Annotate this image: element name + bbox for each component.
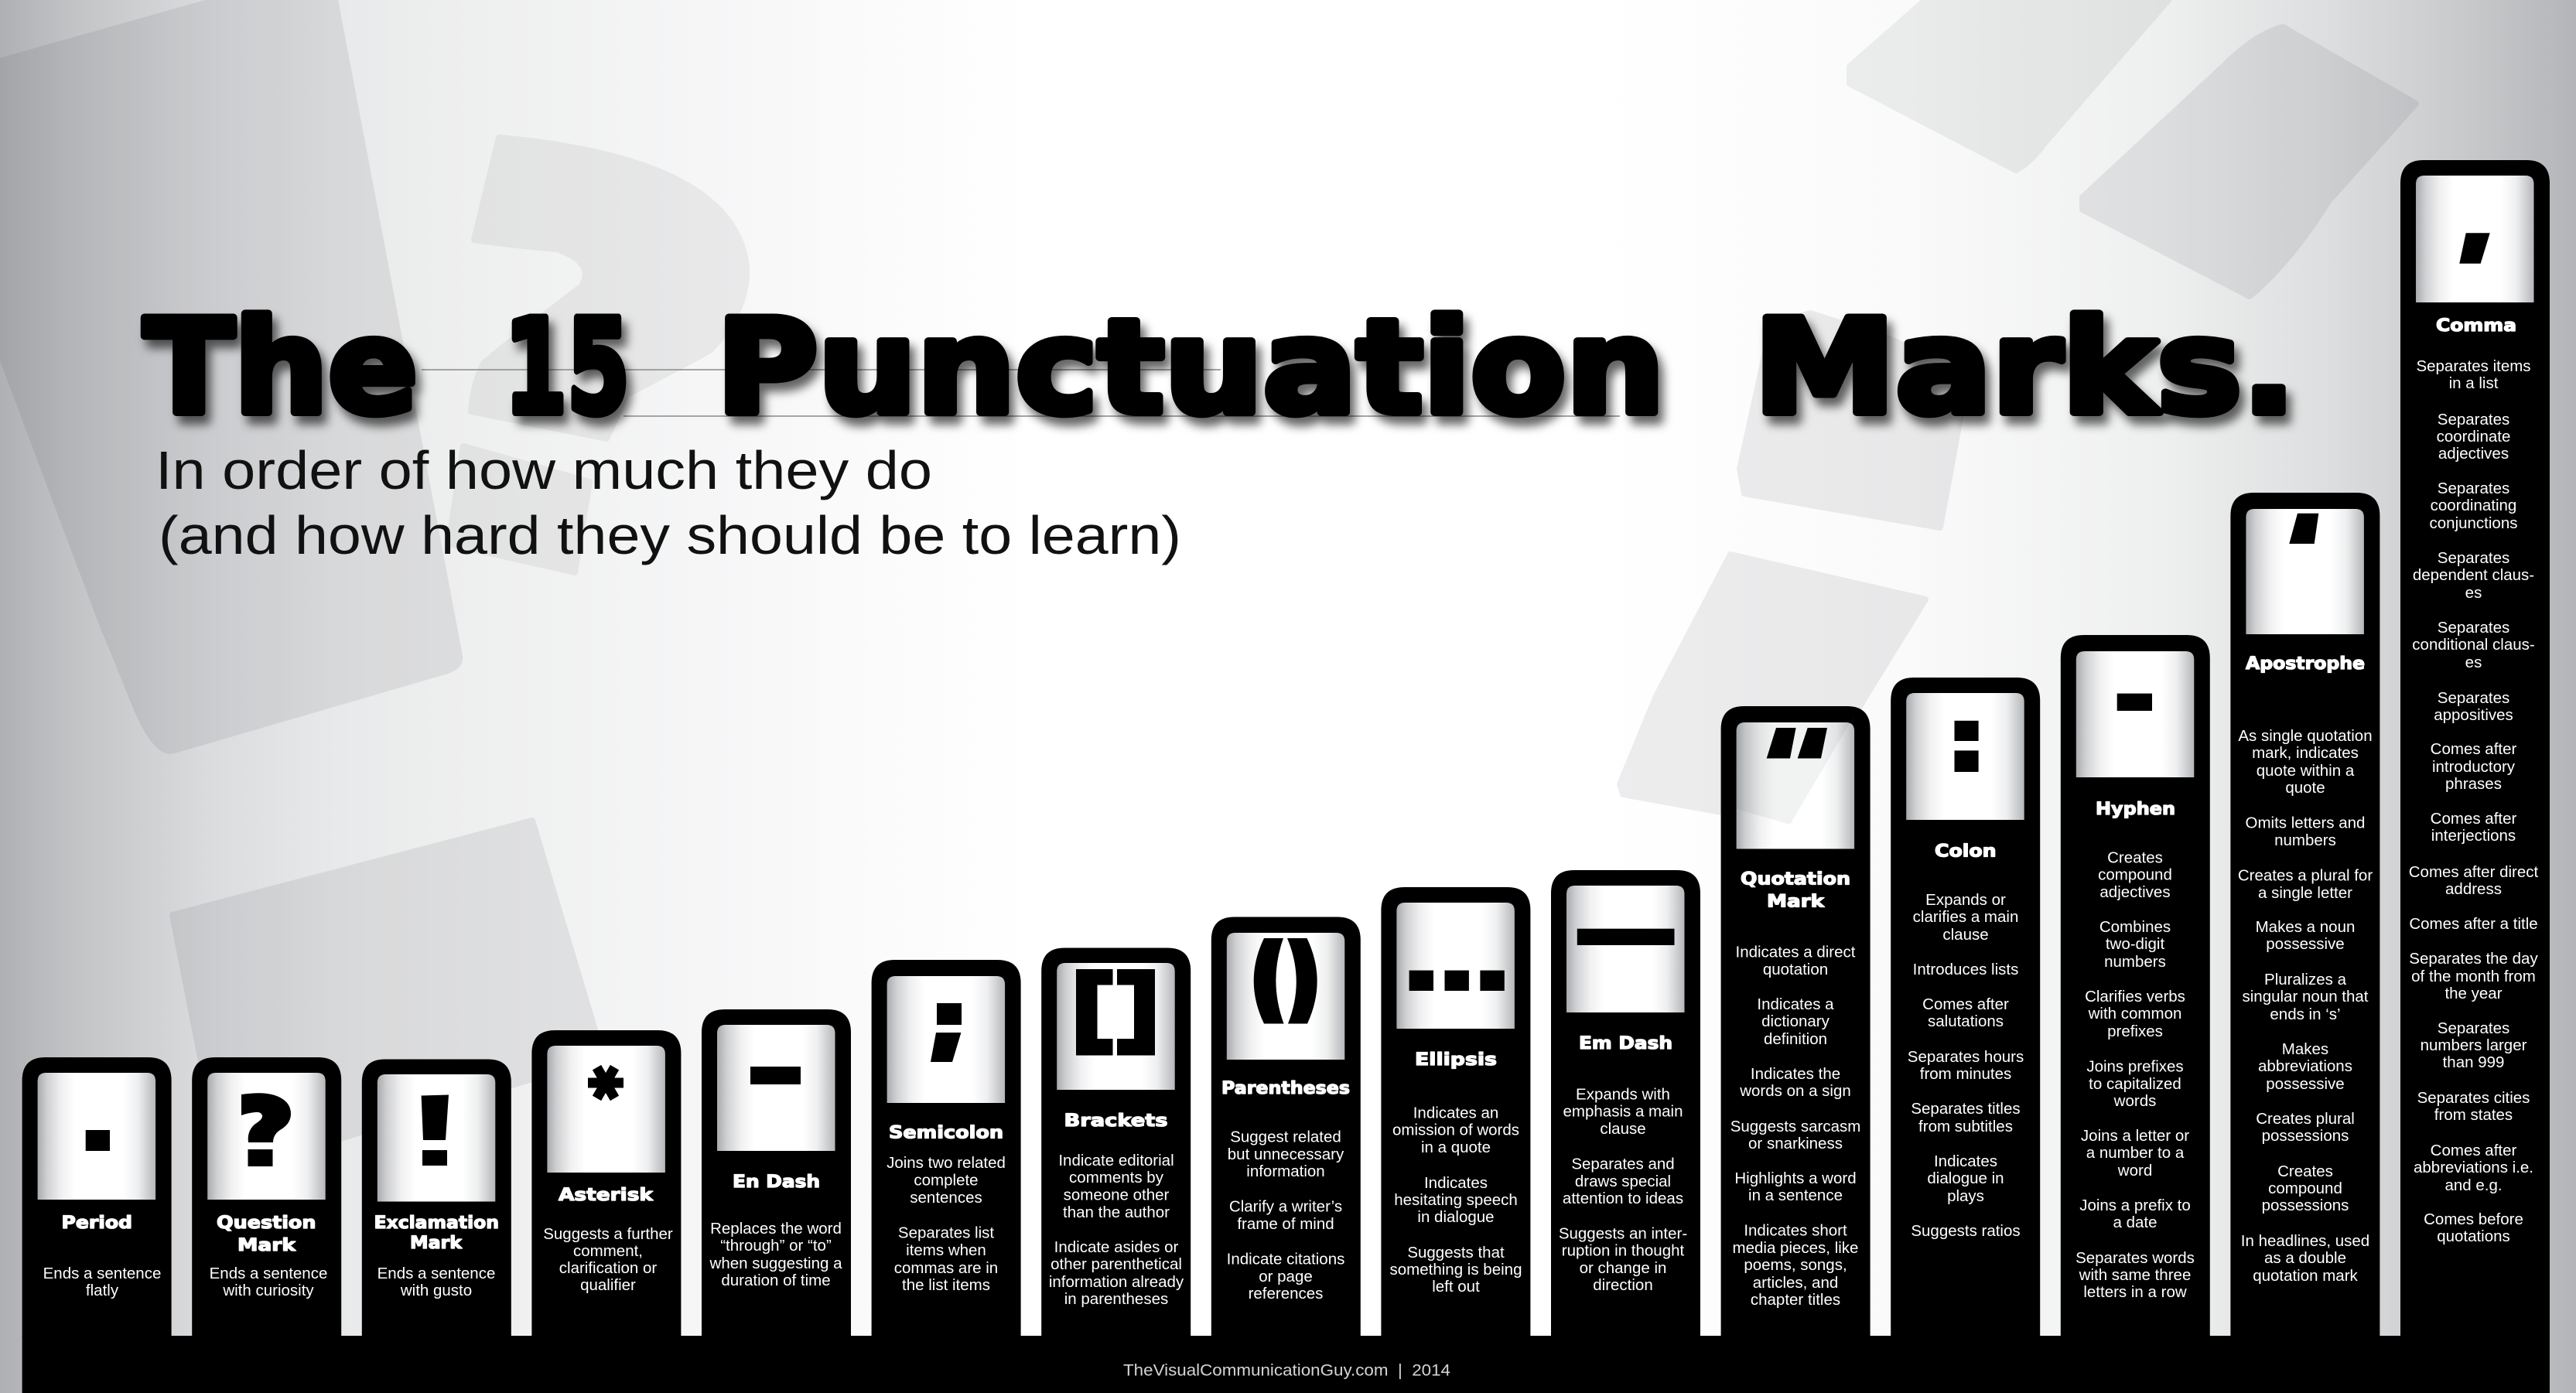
description: compound (2098, 866, 2172, 883)
description: Separates the day (2409, 950, 2538, 968)
description: coordinating (2431, 497, 2516, 514)
description: quotations (2437, 1227, 2510, 1245)
description: es (2465, 584, 2482, 602)
symbol window (378, 1074, 495, 1202)
description: comments by (1069, 1169, 1164, 1186)
card body (1551, 870, 1700, 1338)
description: Separates (2438, 619, 2509, 637)
symbol window (1906, 693, 2024, 820)
description: salutations (1928, 1012, 2004, 1030)
title: The (144, 292, 418, 443)
icon: asterisk (588, 1065, 624, 1101)
description: in dialogue (1417, 1208, 1495, 1226)
description: flatly (86, 1282, 119, 1299)
card body (1381, 887, 1530, 1338)
description: abbreviations (2258, 1057, 2352, 1075)
description: attention to ideas (1563, 1190, 1683, 1207)
description: clause (1942, 926, 1989, 944)
description: with same three (2079, 1266, 2191, 1284)
description: prefixes (2107, 1023, 2163, 1040)
panel: Parentheses (1211, 917, 1361, 1338)
heading (374, 1214, 499, 1253)
footer credit: TheVisualCommunicationGuy.com | 2014 (1123, 1362, 1450, 1380)
description: Separates cities (2417, 1089, 2530, 1107)
heading: Hyphen (2096, 800, 2175, 819)
description: letters in a row (2083, 1283, 2187, 1301)
title: 15 (504, 292, 630, 443)
description: information already (1049, 1273, 1184, 1291)
description: Creates a plural for (2238, 866, 2373, 885)
description: Separates titles (1911, 1100, 2021, 1118)
card body (22, 1057, 172, 1338)
description: left out (1432, 1278, 1480, 1296)
description: Suggests an inter- (1559, 1225, 1687, 1242)
panel: Semicolon (872, 960, 1021, 1338)
heading: Brackets (1064, 1111, 1168, 1131)
panel: Exclamation Mark (362, 1060, 511, 1338)
icon: parentheses (1254, 938, 1317, 1024)
description: coordinate (2437, 428, 2510, 446)
description: Separates (2438, 480, 2509, 497)
card body (192, 1057, 341, 1338)
description: As single quotation (2238, 727, 2373, 745)
description: word (2117, 1162, 2152, 1180)
bottom bar (22, 1336, 2550, 1393)
description: a single letter (2258, 884, 2352, 902)
description: Pluralizes a (2264, 971, 2347, 988)
description: conditional claus- (2412, 636, 2535, 654)
description: Replaces the word (710, 1220, 842, 1238)
card body (362, 1060, 511, 1338)
card body (702, 1009, 851, 1338)
description: numbers (2274, 831, 2336, 849)
description: Combines (2099, 918, 2171, 936)
panel: Period (22, 1057, 172, 1338)
description: information (1246, 1163, 1325, 1180)
description: or page (1259, 1268, 1313, 1285)
description: in parentheses (1064, 1290, 1168, 1308)
panel: Em Dash (1551, 870, 1700, 1338)
description: dependent claus- (2413, 566, 2534, 584)
description: quote (2285, 779, 2325, 797)
panel: Ellipsis (1381, 887, 1530, 1338)
description: Indicates a (1757, 995, 1834, 1013)
icon: quotation mark (1767, 728, 1827, 758)
description: or change in (1580, 1259, 1666, 1277)
description: Clarify a writer’s (1229, 1197, 1342, 1216)
description: Suggests that (1407, 1244, 1505, 1262)
heading: Em Dash (1579, 1034, 1672, 1053)
description: sentences (910, 1189, 982, 1207)
symbol window (1566, 886, 1685, 1012)
description: or snarkiness (1748, 1135, 1843, 1152)
description: Separates (2438, 689, 2509, 707)
description: the year (2444, 985, 2503, 1002)
description: es (2465, 654, 2482, 671)
description: than the author (1063, 1204, 1170, 1221)
description: adjectives (2438, 445, 2509, 463)
heading: Ellipsis (1415, 1050, 1497, 1070)
description: Suggest related (1230, 1128, 1341, 1146)
icon: exclamation mark (422, 1095, 449, 1166)
description: Separates and (1571, 1156, 1675, 1173)
description: hesitating speech (1394, 1191, 1518, 1209)
description: Separates (2438, 549, 2509, 567)
description: Comes after (2431, 1142, 2516, 1159)
description: in a quote (1421, 1139, 1491, 1156)
heading: Question (217, 1214, 316, 1233)
description: Suggests sarcasm (1730, 1118, 1860, 1135)
description: Expands with (1576, 1086, 1670, 1103)
symbol window (1227, 933, 1344, 1060)
icon: question mark (241, 1093, 291, 1166)
description: with common (2088, 1005, 2181, 1023)
description: items when (906, 1241, 986, 1259)
description: Joins prefixes (2086, 1058, 2184, 1075)
description: possessions (2262, 1197, 2349, 1214)
description: poems, songs, (1744, 1256, 1847, 1274)
description: ruption in thought (1562, 1242, 1685, 1259)
description: as a double (2264, 1249, 2346, 1267)
description: Creates plural (2256, 1110, 2355, 1128)
icon: colon (1954, 721, 1979, 772)
title guide lines (422, 370, 1620, 416)
panel: Apostrophe (2230, 493, 2380, 1338)
description: Suggests ratios (1911, 1222, 2021, 1240)
description: Indicates short (1744, 1222, 1847, 1239)
description: in a list (2449, 374, 2499, 392)
description: of the month from (2411, 968, 2536, 985)
description: definition (1764, 1030, 1827, 1048)
description: from states (2434, 1106, 2513, 1124)
heading: Mark (1767, 893, 1826, 911)
description: and e.g. (2444, 1176, 2503, 1194)
description: possessive (2266, 1075, 2345, 1093)
symbol window (547, 1046, 665, 1173)
description: Joins a prefix to (2079, 1197, 2191, 1214)
description: to capitalized (2089, 1075, 2181, 1093)
description: Separates words (2075, 1249, 2195, 1267)
description: qualifier (580, 1276, 636, 1294)
description: “through” or “to” (720, 1237, 832, 1255)
description: but unnecessary (1228, 1145, 1344, 1163)
heading: Comma (2436, 316, 2516, 336)
description: Separates list (898, 1224, 994, 1242)
description: possessive (2266, 935, 2345, 953)
heading: En Dash (733, 1173, 820, 1192)
description: Separates (2438, 411, 2509, 428)
panel: Quotation Mark (1721, 706, 1871, 1338)
description: plays (1947, 1187, 1984, 1205)
description: possessions (2262, 1127, 2349, 1145)
symbol window (2246, 509, 2364, 634)
description: two-digit (2106, 935, 2164, 953)
icon: ellipsis (1409, 971, 1505, 991)
description: Indicate asides or (1054, 1238, 1179, 1256)
description: Comes after direct (2409, 863, 2539, 881)
description: Creates (2277, 1163, 2333, 1180)
panel: Comma (2400, 160, 2550, 1338)
icon: en dash (750, 1067, 801, 1084)
description: Comes after a title (2409, 915, 2538, 933)
icon: apostrophe (2289, 514, 2318, 544)
description: adjectives (2099, 883, 2171, 901)
description: singular noun that (2243, 988, 2369, 1005)
icon: hyphen (2117, 694, 2152, 711)
panel: Colon (1891, 678, 2040, 1338)
description: Comes after (2431, 740, 2516, 758)
title (144, 292, 2296, 443)
description: with curiosity (222, 1282, 314, 1299)
panel: Brackets (1041, 948, 1191, 1338)
card body (1721, 706, 1871, 1338)
description: Introduces lists (1913, 961, 2018, 978)
background: oversized faded punctuation shapes (0, 0, 2416, 1160)
description: commas are in (894, 1259, 998, 1277)
description: references (1249, 1285, 1323, 1303)
panel: En Dash (702, 1009, 851, 1338)
description: something is being (1390, 1261, 1522, 1279)
description: Omits letters and (2246, 814, 2365, 832)
description: numbers (2104, 953, 2166, 971)
description: ends in ‘s’ (2270, 1005, 2341, 1023)
description: introductory (2432, 758, 2516, 776)
symbol window (38, 1073, 155, 1200)
description: the list items (902, 1276, 990, 1294)
symbol window (717, 1025, 835, 1151)
description: words (2113, 1092, 2156, 1110)
subtitle: In order of how much they do (155, 440, 932, 500)
heading: Apostrophe (2246, 654, 2365, 674)
description: appositives (2434, 706, 2513, 724)
description: media pieces, like (1733, 1239, 1858, 1257)
description: dictionary (1761, 1012, 1830, 1030)
description: Comes before (2424, 1210, 2523, 1228)
description: direction (1593, 1276, 1653, 1294)
symbol window (1396, 903, 1515, 1029)
description: phrases (2445, 775, 2502, 793)
heading: Period (62, 1214, 132, 1233)
description: words on a sign (1739, 1082, 1851, 1100)
heading: Exclamation (374, 1214, 499, 1233)
panel: Question Mark (192, 1057, 341, 1338)
card body (872, 960, 1021, 1338)
background shape showing through window (1737, 715, 1854, 825)
description: from minutes (1920, 1065, 2011, 1083)
icon: brackets (1076, 969, 1155, 1055)
heading: Quotation (1741, 869, 1850, 889)
card body (1211, 917, 1361, 1338)
heading: Mark (237, 1236, 297, 1255)
description: Makes (2282, 1040, 2328, 1058)
description: Indicates a direct (1736, 944, 1856, 961)
description: with gusto (400, 1282, 472, 1299)
description: Clarifies verbs (2085, 988, 2185, 1005)
card body (531, 1030, 681, 1338)
panel: Asterisk (531, 1030, 681, 1338)
symbol window (2076, 651, 2194, 777)
description: comment, (573, 1242, 643, 1260)
description: complete (914, 1171, 979, 1190)
description: in a sentence (1748, 1186, 1843, 1204)
description: Suggests a further (543, 1225, 673, 1243)
heading: Colon (1935, 842, 1997, 862)
subtitle: (and how hard they should be to learn) (159, 505, 1181, 565)
description: numbers larger (2421, 1036, 2527, 1054)
icon: semicolon (931, 1003, 962, 1062)
description: clause (1600, 1120, 1646, 1138)
title: Marks. (1754, 292, 2296, 443)
description: Indicates (1934, 1152, 1997, 1170)
heading: Parentheses (1221, 1079, 1350, 1098)
description: clarification or (559, 1259, 657, 1277)
description: Joins two related (887, 1154, 1006, 1172)
description: someone other (1064, 1186, 1170, 1204)
symbol window (1057, 963, 1175, 1090)
description: Indicate citations (1227, 1250, 1344, 1268)
description: quote within a (2257, 762, 2355, 780)
description: Indicates an (1413, 1104, 1498, 1122)
description: Comes after (1922, 995, 2009, 1013)
description: clarifies a main (1913, 908, 2018, 926)
description: quotation (1763, 961, 1828, 978)
description: a number to a (2086, 1144, 2185, 1162)
card body (1891, 678, 2040, 1338)
description: Highlights a word (1734, 1169, 1857, 1187)
description: Makes a noun (2256, 918, 2355, 936)
description: other parenthetical (1051, 1255, 1182, 1273)
card body (2061, 635, 2210, 1338)
description: draws special (1575, 1173, 1671, 1190)
symbol window (2416, 176, 2534, 302)
description: frame of mind (1237, 1215, 1334, 1233)
description: when suggesting a (709, 1255, 842, 1272)
description: articles, and (1753, 1274, 1838, 1292)
heading (217, 1214, 316, 1255)
card body (2230, 493, 2380, 1338)
description: compound (2268, 1180, 2342, 1197)
description: than 999 (2443, 1053, 2504, 1071)
description: Ends a sentence (210, 1265, 327, 1282)
description: Separates (2438, 1019, 2509, 1037)
card body (1041, 948, 1191, 1338)
symbol window (207, 1073, 326, 1200)
heading (1741, 869, 1850, 911)
description: Expands or (1925, 891, 2006, 909)
description: Indicate editorial (1058, 1152, 1174, 1169)
heading: Asterisk (559, 1186, 654, 1205)
description: Comes after (2431, 810, 2516, 828)
description: abbreviations i.e. (2414, 1159, 2533, 1176)
description: Separates hours (1908, 1048, 2024, 1066)
symbol window (1737, 722, 1854, 849)
description: Joins a letter or (2081, 1127, 2189, 1145)
description: a date (2113, 1214, 2157, 1231)
symbol window (887, 976, 1005, 1103)
panel: Hyphen (2061, 635, 2210, 1338)
description: quotation mark (2253, 1267, 2359, 1285)
description: conjunctions (2430, 514, 2517, 532)
description: mark, indicates (2252, 744, 2359, 762)
description: Indicates (1424, 1174, 1488, 1192)
description: Separates items (2416, 357, 2531, 375)
title: Punctuation (716, 292, 1665, 443)
icon: em dash (1577, 929, 1674, 945)
description: Indicates the (1751, 1065, 1840, 1083)
description: duration of time (721, 1272, 831, 1289)
icon: comma (2459, 233, 2490, 264)
description: Ends a sentence (378, 1265, 495, 1282)
description: emphasis a main (1563, 1103, 1683, 1120)
description: dialogue in (1927, 1169, 2004, 1187)
description: Creates (2107, 849, 2163, 866)
subtitle (155, 440, 1181, 565)
description: omission of words (1392, 1122, 1519, 1139)
description: address (2445, 880, 2502, 898)
description: interjections (2431, 827, 2516, 845)
description: from subtitles (1918, 1118, 2013, 1135)
description: Ends a sentence (43, 1265, 161, 1282)
description: In headlines, used (2241, 1232, 2369, 1250)
heading: Semicolon (889, 1124, 1003, 1143)
description: chapter titles (1751, 1291, 1840, 1309)
card body (2400, 160, 2550, 1338)
icon: period (86, 1130, 110, 1151)
heading: Mark (410, 1234, 463, 1253)
